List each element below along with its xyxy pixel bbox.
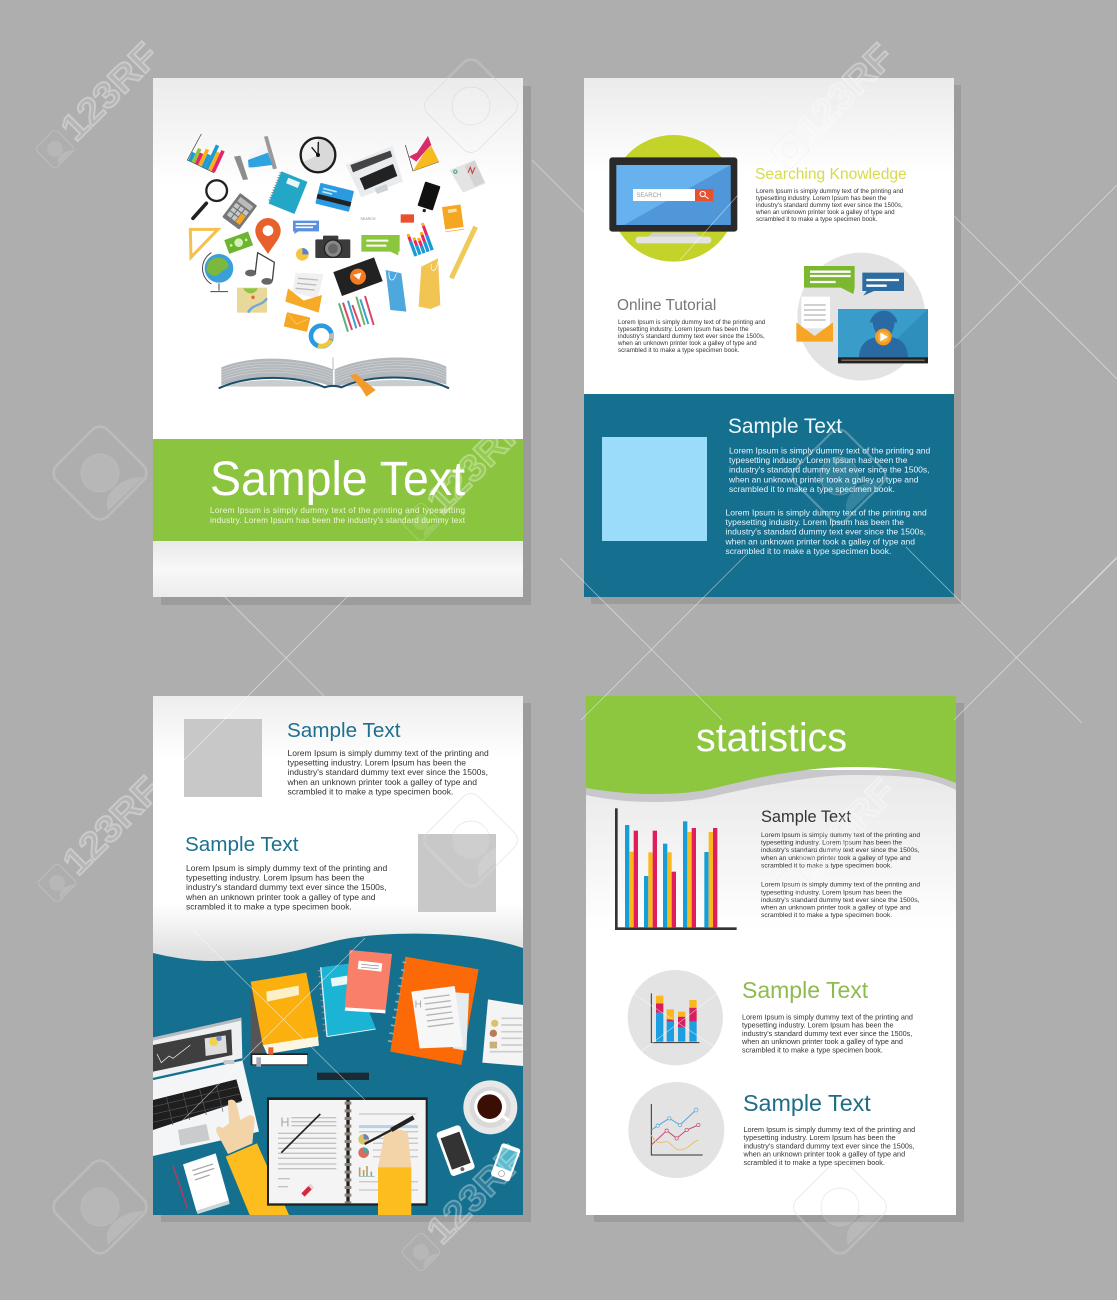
watermark: stamp pattern: 123RF [419,1138,533,1252]
panel: desk page [153,696,531,1222]
text: teal section paragraph: when an unknown printer took a galley of type and [742,1150,905,1159]
text: teal paragraph one: scrambled it to make a type specimen book. [729,484,895,494]
icon: coral book [345,950,392,1013]
text: statistics paragraph two: Lorem Ipsum is simply dummy text of the printing and [761,882,920,889]
text: paragraph one: industry's standard dummy text ever since the 1500s, [288,767,488,777]
text: teal section paragraph: industry's standard dummy text ever since the 1500s, [744,1141,915,1150]
icon: right hand and pen [365,1117,414,1215]
icon: music note [245,253,274,285]
heading: searching knowledge: Searching Knowledge [755,166,907,183]
image placeholder: top grey square [184,719,262,797]
icon: globe [203,253,233,292]
icon: tablet [416,181,441,215]
text: paragraph two: typesetting industry. Lorem Ipsum has been the [186,873,365,883]
text: teal paragraph one: when an unknown printer took a galley of type and [728,474,919,484]
heading: sample text one: Sample Text [287,719,401,742]
heading: online tutorial: Online Tutorial [617,297,716,314]
text: green section paragraph: Lorem Ipsum is simply dummy text of the printing and [742,1012,913,1022]
text: teal section paragraph: scrambled it to make a type specimen book. [744,1158,885,1167]
text: tutorial paragraph: when an unknown printer took a galley of type and [617,340,757,347]
icon: set square [190,229,218,257]
icon: line chart circle [628,1082,724,1178]
watermark: stamp pattern [35,35,904,1272]
icon: laptop [153,1018,259,1156]
text: paragraph one: scrambled it to make a type specimen book. [288,786,453,796]
text: paragraph one: Lorem Ipsum is simply dummy text of the printing and [288,748,489,758]
icon: magnifier [193,180,227,218]
heading: sample text two: Sample Text [185,833,299,856]
text: green section paragraph: when an unknown printer took a galley of type and [741,1037,903,1046]
text: searching paragraph: Lorem Ipsum is simply dummy text of the printing and [756,188,904,195]
text: paragraph one: when an unknown printer took a galley of type and [286,777,477,787]
icon: donut chart [311,326,332,346]
panel: statistics page [586,696,964,1222]
icon: map pin [255,218,281,254]
icon: open book [219,357,449,397]
text: paragraph two: industry's standard dummy text ever since the 1500s, [186,882,387,892]
text: statistics paragraph one: industry's standard dummy text ever since the 1500s, [761,847,920,854]
watermark: stamp pattern: 123RF [788,36,902,150]
icon: stacked bar chart circle [628,970,723,1065]
icon: megaphone [234,136,277,180]
text: statistics paragraph two: typesetting industry. Lorem Ipsum has been the [761,889,902,896]
icon: blue chat bubble [293,221,319,234]
illustration: online tutorial [796,253,928,381]
icon: coffee cup [463,1080,517,1134]
text: paragraph two: scrambled it to make a type specimen book. [186,901,352,911]
text: paragraph two: Lorem Ipsum is simply dummy text of the printing and [186,863,388,873]
text: statistics paragraph one: scrambled it to make a type specimen book. [761,862,892,869]
icon: red pen [173,1166,187,1208]
icon: map [237,288,267,313]
icon: orange spiral notebook [389,957,479,1065]
cover subtitle: industry. Lorem Ipsum has been the industry's standard dummy text [210,516,466,525]
text: statistics paragraph two: scrambled it to make a type specimen book. [761,912,892,919]
icon: black marker [317,1073,369,1080]
icon: small phone [490,1143,521,1182]
icon: left hand and sleeve [216,1100,289,1215]
text: tutorial paragraph: scrambled it to make a type specimen book. [618,347,740,354]
text: teal section paragraph: typesetting industry. Lorem Ipsum has been the [744,1133,896,1142]
heading: sample text teal: Sample Text [743,1090,871,1116]
icon: report document [450,160,486,193]
illustration: search monitor [609,135,737,262]
icon: open envelope with letter [285,273,324,313]
icon: blue notebook [268,171,307,214]
text: searching paragraph: scrambled it to make a type specimen book. [756,216,878,223]
cover title: Sample Text [210,453,465,506]
text: teal section paragraph: Lorem Ipsum is simply dummy text of the printing and [744,1125,915,1134]
icon: yellow book [442,204,464,232]
grey wave [586,770,956,802]
icon: clock [301,138,335,172]
teal wave background [153,934,523,1215]
icon: camera [315,236,350,258]
heading: sample text dark: Sample Text [761,808,851,826]
icon: report sheet [482,999,523,1066]
bar chart [615,808,737,930]
watermark: stamp pattern: 123RF [790,771,904,885]
green header wave [586,696,956,794]
heading: sample text green: Sample Text [742,977,869,1003]
image placeholder: second grey square [418,834,496,912]
icon: laptop [346,146,403,197]
icon: open spiral notebook: H [280,1116,289,1130]
text: green section paragraph: typesetting industry. Lorem Ipsum has been the [742,1021,894,1030]
icon: small pie chart [296,248,309,261]
icon: orange spiral notebook: H [415,999,422,1010]
text: teal paragraph two: industry's standard dummy text ever since the 1500s, [726,527,926,537]
icon: blue shopping bag [386,270,406,312]
icon: area chart [405,136,439,171]
text: tutorial paragraph: industry's standard dummy text ever since the 1500s, [618,333,765,340]
text: teal paragraph two: scrambled it to make a type specimen book. [726,546,891,556]
section: teal lower block [584,394,954,597]
image placeholder: light blue square [602,437,707,541]
text: teal paragraph one: typesetting industry. Lorem Ipsum has been the [729,455,908,465]
icon: search label: SEARCH [360,217,376,221]
text: searching paragraph: industry's standard dummy text ever since the 1500s, [756,202,903,209]
text: statistics paragraph one: Lorem Ipsum is simply dummy text of the printing and [761,832,920,839]
text: paragraph one: typesetting industry. Lorem Ipsum has been the [288,758,466,768]
text: green section paragraph: scrambled it to make a type specimen book. [742,1045,883,1054]
icon: multicolor line bars [339,296,374,332]
green band [153,439,523,541]
icon: small envelope [284,312,310,332]
text: tutorial paragraph: Lorem Ipsum is simply dummy text of the printing and [618,319,766,326]
watermark: stamp pattern: 123RF [53,35,167,149]
title: statistics: statistics [696,716,847,760]
text: searching paragraph: typesetting industry. Lorem Ipsum has been the [756,195,887,202]
icon: banknote [224,231,253,254]
text: teal paragraph two: typesetting industry. Lorem Ipsum has been the [726,517,904,527]
icon: dot bar chart [404,222,434,257]
text: searching paragraph: when an unknown printer took a galley of type and [755,209,895,216]
text: teal paragraph two: Lorem Ipsum is simply dummy text of the printing and [726,508,927,518]
illustration: search monitor: SEARCH [636,193,661,199]
text: teal paragraph two: when an unknown printer took a galley of type and [724,536,915,546]
text: teal paragraph one: industry's standard dummy text ever since the 1500s, [729,465,930,475]
watermark: diagonal lines [180,160,1117,1123]
text: statistics paragraph one: when an unknown printer took a galley of type and [760,855,911,862]
icon: credit card [315,183,354,212]
heading: sample text on teal: Sample Text [728,415,842,438]
text: statistics paragraph two: when an unknown printer took a galley of type and [760,904,911,912]
icon: teal notebook [319,963,376,1037]
icon: smartphone [436,1124,476,1177]
icon: long ruler [451,227,476,278]
icon: stacked orange book [251,973,319,1067]
panel: knowledge and tutorial page [584,78,961,604]
illustration: icons rising from book [187,134,486,397]
icon: open spiral notebook [267,1097,428,1206]
text: statistics paragraph two: industry's standard dummy text ever since the 1500s, [761,897,920,904]
text: teal paragraph one: Lorem Ipsum is simply dummy text of the printing and [729,446,931,456]
icon: green chat bubble [361,235,400,255]
icon: bar chart [187,134,226,173]
illustration: desk top view [153,950,523,1215]
icon: pencil [281,1114,320,1153]
watermark: stamp pattern: 123RF [419,408,533,522]
icon: video tablet [333,257,383,296]
watermark: stamp pattern: 123RF [55,769,169,883]
cover subtitle: Lorem Ipsum is simply dummy text of the printing and typesetting [210,506,465,515]
text: paragraph two: when an unknown printer took a galley of type and [185,892,376,902]
text: green section paragraph: industry's standard dummy text ever since the 1500s, [742,1029,912,1038]
icon: note pad [183,1153,230,1214]
soft grey gradient [586,770,956,930]
icon: calculator [222,193,257,230]
text: statistics paragraph one: typesetting industry. Lorem Ipsum has been the [761,840,902,847]
panel: cover page [153,78,531,605]
text: tutorial paragraph: typesetting industry. Lorem Ipsum has been the [618,326,749,333]
icon: search button [401,214,414,223]
icon: yellow shopping bag [419,258,440,309]
